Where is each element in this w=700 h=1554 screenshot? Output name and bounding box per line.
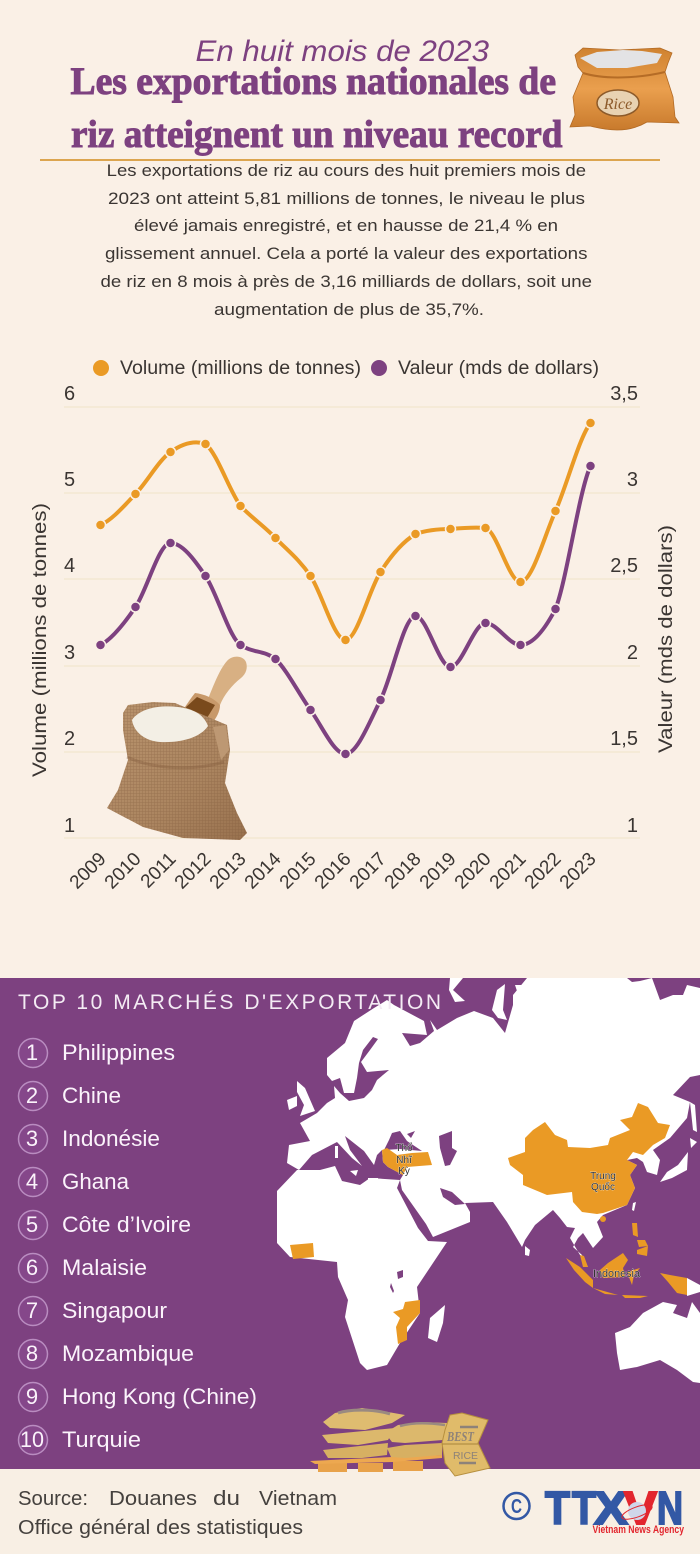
map: Cote d'Ivoire and Ghana bbox=[290, 1243, 314, 1259]
map label: Turkey bbox=[395, 1142, 413, 1177]
map: Great Britain and Ireland bbox=[287, 1081, 315, 1116]
right axis numbers: 2,5 bbox=[610, 555, 638, 577]
left axis numbers: 5 bbox=[64, 469, 75, 491]
left axis numbers: 1 bbox=[64, 815, 75, 837]
left axis numbers: 6 bbox=[64, 383, 75, 405]
map: Persian Gulf bbox=[440, 1188, 465, 1205]
map label: Turkey: Nhĩ bbox=[396, 1155, 413, 1166]
right axis numbers: 1,5 bbox=[610, 728, 638, 750]
x axis years: 2012 bbox=[171, 849, 216, 893]
left axis numbers: 3 bbox=[64, 642, 75, 664]
logo: copyright TTXVN: V bbox=[624, 1482, 657, 1534]
map label: Turkey: Kỳ bbox=[398, 1166, 410, 1177]
right axis numbers: 2 bbox=[627, 642, 638, 664]
icon: burlap rice sack with scoop bbox=[107, 657, 247, 840]
icon: stacked rice bags on pallet: RICE bbox=[453, 1451, 478, 1462]
ranked list: Indonésie bbox=[62, 1126, 160, 1151]
intro text block: 2023 ont atteint 5,81 millions de tonnes, le niveau le plus bbox=[108, 189, 585, 208]
map: Turkey bbox=[382, 1148, 432, 1175]
x axis years: 2011 bbox=[137, 849, 181, 892]
source text bbox=[18, 1488, 337, 1539]
ranked list: 2 bbox=[26, 1083, 38, 1108]
logo: copyright TTXVN: C bbox=[511, 1496, 522, 1518]
map: Arctic islands bbox=[449, 978, 527, 1020]
x axis years: 2022 bbox=[521, 849, 566, 893]
ranked list: 3 bbox=[26, 1126, 38, 1151]
logo: copyright TTXVN bbox=[504, 1482, 685, 1536]
right axis numbers: 3,5 bbox=[610, 383, 638, 405]
icon: orange rice bag bbox=[570, 48, 679, 130]
map: Madagascar bbox=[428, 1305, 445, 1342]
right axis numbers: 1 bbox=[627, 815, 638, 837]
ranked list: 5 bbox=[26, 1212, 38, 1237]
title bbox=[70, 60, 563, 156]
icon: stacked rice bags on pallet: BEST bbox=[446, 1430, 475, 1445]
ranked list: 1 bbox=[26, 1040, 38, 1065]
map label: China: Quốc bbox=[591, 1181, 615, 1193]
value series bbox=[96, 461, 596, 759]
map: Papua New Guinea bbox=[687, 1278, 700, 1296]
icon: stacked rice bags on pallet bbox=[310, 1408, 490, 1476]
x axis years: 2017 bbox=[346, 849, 391, 893]
map label: Turkey: Thổ bbox=[395, 1142, 413, 1154]
map: Black Sea bbox=[384, 1131, 422, 1151]
x axis years: 2013 bbox=[206, 849, 251, 893]
source text: du bbox=[213, 1488, 240, 1510]
ranked list: 10 bbox=[20, 1427, 44, 1452]
ranked list: Ghana bbox=[62, 1169, 130, 1194]
intro text block: augmentation de plus de 35,7%. bbox=[214, 300, 484, 319]
ranked list: 8 bbox=[26, 1341, 38, 1366]
ranked list: 6 bbox=[26, 1255, 38, 1280]
ranked list: Malaisie bbox=[62, 1255, 147, 1280]
chart legend bbox=[93, 358, 599, 379]
left axis numbers: 2 bbox=[64, 728, 75, 750]
map label: Indonesia: Indonesia bbox=[593, 1268, 641, 1280]
map: Sri Lanka bbox=[525, 1246, 530, 1256]
map: Eurasia bbox=[287, 978, 700, 1267]
x axis years: 2018 bbox=[381, 849, 426, 893]
logo: copyright TTXVN: X bbox=[594, 1482, 628, 1534]
logo: copyright TTXVN: T bbox=[572, 1482, 596, 1534]
source text: Vietnam bbox=[259, 1488, 337, 1510]
intro text block bbox=[100, 161, 592, 319]
line chart bbox=[30, 383, 677, 893]
chart legend: Valeur (mds de dollars) bbox=[398, 358, 599, 379]
right axis numbers bbox=[610, 383, 638, 837]
ranked list: 9 bbox=[26, 1384, 38, 1409]
ranked list: Turquie bbox=[62, 1427, 141, 1452]
source text: Douanes bbox=[109, 1488, 197, 1510]
x axis years: 2023 bbox=[556, 849, 601, 893]
x axis years: 2020 bbox=[451, 849, 496, 893]
x axis years: 2009 bbox=[66, 849, 111, 893]
ranked list: 7 bbox=[26, 1298, 38, 1323]
map: Mediterranean islands bbox=[335, 1146, 378, 1180]
ranked list: Côte d’Ivoire bbox=[62, 1212, 191, 1237]
heading: TOP 10 MARCHÉS D'EXPORTATION bbox=[18, 991, 441, 1014]
volume series bbox=[96, 418, 596, 645]
world map bbox=[277, 978, 700, 1383]
x axis years bbox=[66, 848, 601, 893]
right axis title: Valeur (mds de dollars) bbox=[656, 525, 677, 753]
map label: China bbox=[590, 1171, 616, 1193]
logo: copyright TTXVN: T bbox=[545, 1482, 570, 1534]
subtitle: En huit mois de 2023 bbox=[196, 35, 489, 68]
logo: copyright TTXVN: N bbox=[657, 1482, 683, 1534]
source text: Office général des statistiques bbox=[18, 1517, 303, 1539]
map: Japan, Sakhalin and Taiwan bbox=[632, 1102, 697, 1211]
right axis numbers: 3 bbox=[627, 469, 638, 491]
icon: orange rice bag: Rice bbox=[603, 96, 632, 113]
ranked list: Mozambique bbox=[62, 1341, 194, 1366]
intro text block: de riz en 8 mois à près de 3,16 milliards de dollars, soit une bbox=[100, 272, 592, 291]
chart legend: Volume (millions de tonnes) bbox=[120, 358, 361, 379]
title rule bbox=[40, 159, 660, 161]
x axis years: 2016 bbox=[311, 849, 356, 893]
x axis years: 2014 bbox=[241, 848, 286, 893]
x axis years: 2019 bbox=[416, 849, 461, 893]
x axis years: 2010 bbox=[101, 849, 146, 893]
intro text block: élevé jamais enregistré, et en hausse de 21,4 % en bbox=[134, 216, 558, 235]
title: Les exportations nationales de bbox=[70, 60, 556, 103]
left axis title: Volume (millions de tonnes) bbox=[30, 503, 51, 777]
map: Caspian Sea bbox=[439, 1131, 457, 1166]
footer background bbox=[0, 1469, 700, 1554]
intro text block: glissement annuel. Cela a porté la valeur des exportations bbox=[105, 244, 588, 263]
x axis years: 2021 bbox=[486, 849, 531, 893]
ranked list: Hong Kong (Chine) bbox=[62, 1384, 257, 1409]
title: riz atteignent un niveau record bbox=[71, 113, 563, 156]
ranked list: Chine bbox=[62, 1083, 121, 1108]
map label: China: Trung bbox=[590, 1171, 616, 1182]
ranked list: Singapour bbox=[62, 1298, 167, 1323]
left axis numbers: 4 bbox=[64, 555, 75, 577]
map: Indonesia, Malaysia, Philippines, Singapore bbox=[566, 1223, 687, 1298]
map: African lakes bbox=[390, 1270, 403, 1293]
intro text block: Les exportations de riz au cours des huit premiers mois de bbox=[107, 161, 586, 180]
map: Africa bbox=[277, 1166, 447, 1370]
source text: Source: bbox=[18, 1488, 88, 1510]
x axis years: 2015 bbox=[276, 849, 321, 893]
map: China bbox=[508, 1103, 670, 1214]
map: Hainan bbox=[600, 1216, 606, 1222]
panel: top 10 markets bbox=[0, 978, 700, 1469]
map: Mozambique bbox=[393, 1300, 420, 1344]
ranked list bbox=[18, 1038, 257, 1454]
ranked list: Philippines bbox=[62, 1040, 175, 1065]
ranked list: 4 bbox=[26, 1169, 38, 1194]
map: Australia bbox=[615, 1302, 700, 1383]
left axis numbers bbox=[64, 383, 75, 837]
